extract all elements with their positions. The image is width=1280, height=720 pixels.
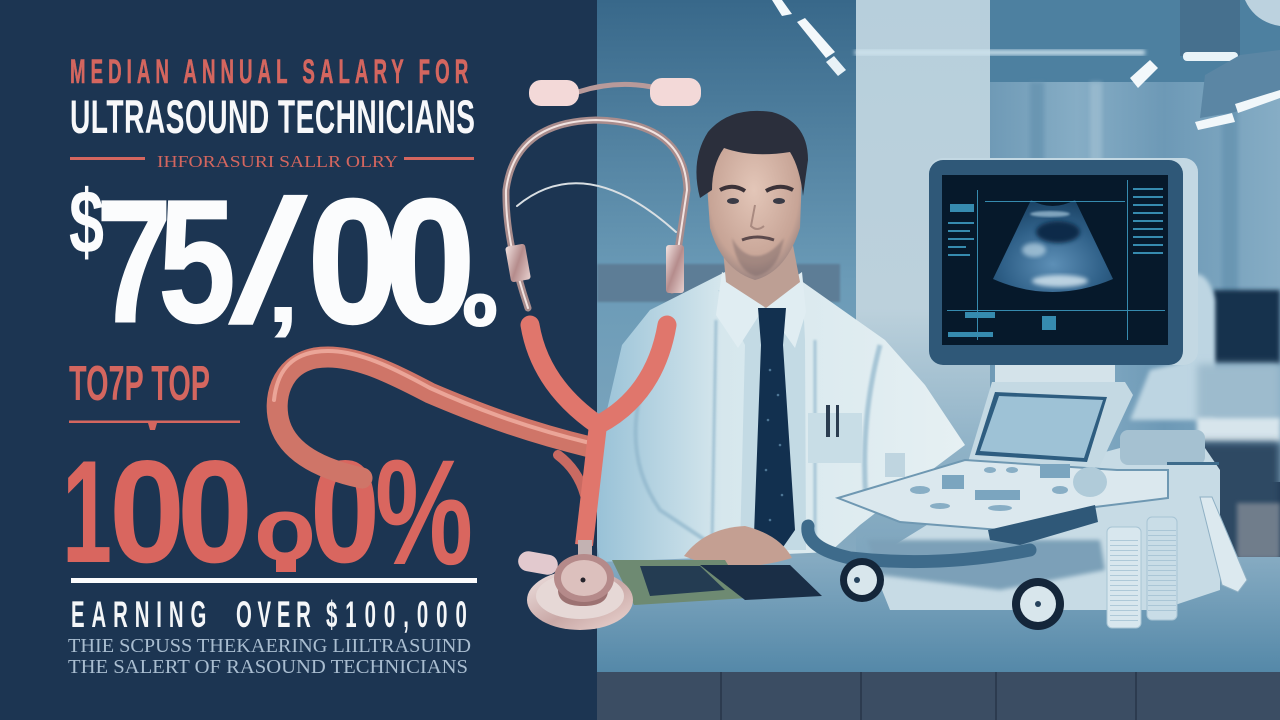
desk front panels [597, 672, 1280, 720]
heading: ultrasound technicians: ULTRASOUND TECHNICIANS [70, 92, 475, 144]
gel bottles [1107, 517, 1177, 628]
ceiling lights [772, 0, 1280, 130]
descriptive text [68, 635, 471, 678]
earning over text: OVER [236, 595, 311, 636]
tie [754, 308, 795, 560]
ultrasound image [993, 200, 1113, 292]
hand [684, 526, 792, 568]
tablet control screen [968, 382, 1133, 470]
white divider rule [71, 578, 477, 583]
big percent figure: 0 [310, 430, 380, 593]
big salary figure: 7 [96, 164, 172, 360]
salmon Y tubes [530, 325, 667, 425]
front handle [808, 526, 1030, 562]
big salary figure: / [230, 164, 307, 359]
coat shadows and folds [636, 320, 880, 545]
panel: clinic photo scene [592, 0, 1280, 720]
eyes, brows and mouth [720, 187, 793, 276]
metal binaurals [506, 120, 687, 308]
probe [1200, 497, 1247, 592]
big percent figure: o [254, 480, 316, 580]
big salary figure: $ [69, 173, 104, 273]
background desk, dark monitor and colleague [1130, 274, 1280, 560]
chest piece [517, 540, 633, 630]
big percent figure: 0 [109, 430, 185, 593]
heading: median annual salary: MEDIAN ANNUAL SALARY FOR [70, 52, 468, 90]
wheels [840, 558, 1064, 630]
stem [584, 425, 598, 545]
big percent figure: 1 [62, 430, 112, 593]
earning over text: EARNING [71, 595, 206, 636]
neck [722, 240, 800, 308]
white coat [592, 272, 965, 562]
long looping tube [274, 351, 590, 478]
hair [696, 111, 808, 198]
descriptive text: THE SALERT OF RASOUND TECHNICIANS [68, 656, 468, 678]
panel: navy text background [0, 0, 598, 720]
earning over text: $100,000 [326, 595, 467, 636]
shirt and collar [718, 280, 806, 550]
metal joints [505, 244, 684, 293]
machine body [870, 448, 1220, 610]
rule under top label [69, 420, 240, 430]
branch tube [558, 455, 585, 495]
big salary figure: 0 [308, 164, 398, 360]
big percent figure [62, 428, 473, 596]
subheading with rules: IHFORASURI SALLR OLRY [157, 152, 398, 171]
big percent figure: % [375, 428, 473, 596]
ear tips [529, 78, 701, 106]
technician [592, 111, 965, 568]
ultrasound machine [808, 158, 1247, 630]
big salary figure: 5 [158, 164, 236, 360]
desk surface [597, 557, 1280, 673]
label: top percent: TO7P TOP [69, 357, 210, 411]
tie dots [765, 369, 783, 521]
big salary figure [69, 164, 497, 360]
big percent figure: 0 [177, 430, 253, 593]
control console [838, 453, 1168, 545]
big salary figure: o [463, 274, 497, 337]
big salary figure: 0 [385, 164, 475, 360]
notebook and tablet [612, 560, 822, 605]
clinic back wall [597, 0, 1280, 560]
ear tube connector [578, 84, 652, 92]
descriptive text: THIE SCPUSS THEKAERING LIILTRASUIND [68, 635, 471, 657]
earning over text [71, 595, 467, 636]
monitor readouts [947, 180, 1165, 340]
subheading with rules [70, 152, 474, 171]
big salary figure: , [266, 232, 300, 344]
monitor [929, 158, 1198, 365]
stand [995, 365, 1115, 382]
icon: stethoscope [274, 78, 701, 630]
shadow under console [867, 540, 1105, 590]
face [708, 148, 802, 280]
coat pocket with pens [808, 405, 862, 463]
